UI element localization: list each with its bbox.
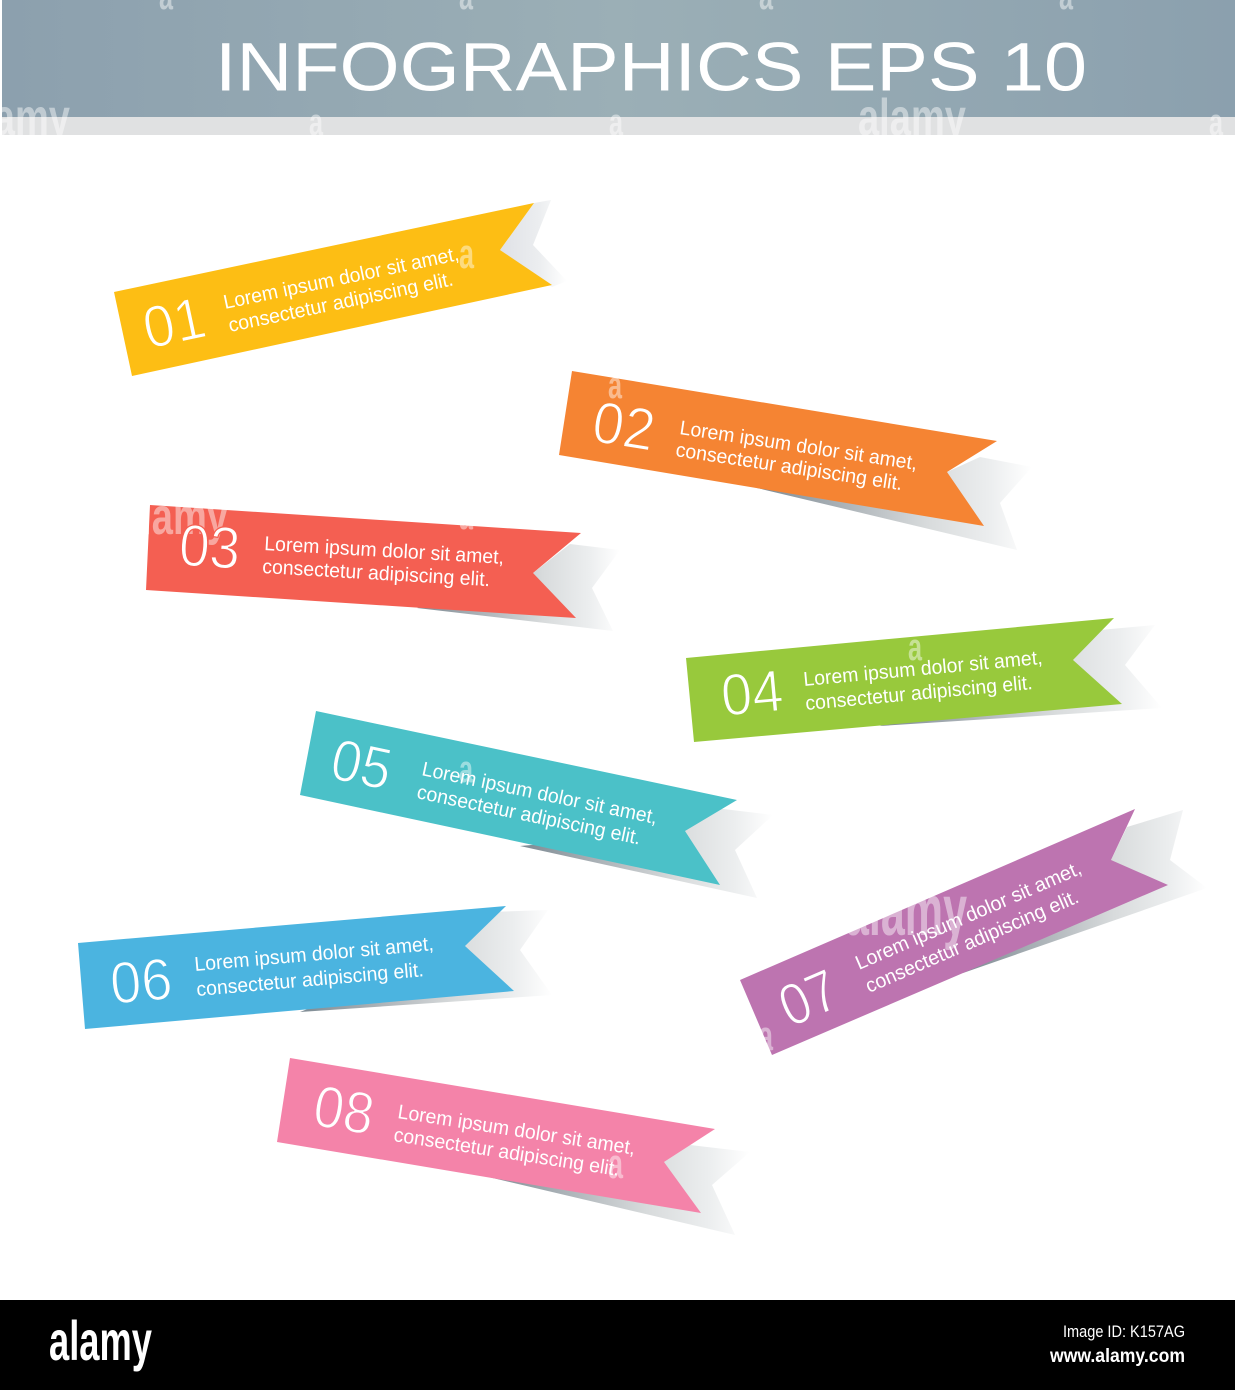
ribbon 03: alamy xyxy=(120,488,228,546)
footer logo: alamy xyxy=(49,1309,152,1372)
ribbon 08: consectetur adipiscing elit. xyxy=(392,1124,621,1181)
ribbon 05: a xyxy=(459,749,474,791)
ribbon 04: consectetur adipiscing elit. xyxy=(804,672,1033,715)
ribbon 08: 08 xyxy=(309,1073,379,1148)
ribbon 01: a xyxy=(459,230,474,277)
ribbon 02 xyxy=(559,365,1032,550)
ribbon 04: 04 xyxy=(718,657,786,729)
ribbon 02: a xyxy=(608,365,623,407)
header banner xyxy=(0,0,1235,147)
ribbon 06: consectetur adipiscing elit. xyxy=(196,959,425,1001)
ribbon 03: a xyxy=(459,496,474,538)
ribbon 07: alamy xyxy=(845,871,967,951)
image id: Image ID: K157AG xyxy=(1063,1322,1185,1341)
ribbon 07 xyxy=(740,809,1207,1059)
ribbon 02: 02 xyxy=(588,389,660,464)
ribbon 08: a xyxy=(608,1140,623,1187)
ribbon 06: Lorem ipsum dolor sit amet, xyxy=(194,933,435,976)
ribbon 03: consectetur adipiscing elit. xyxy=(262,556,491,591)
footer bar xyxy=(0,1300,1235,1390)
title: INFOGRAPHICS EPS 10 xyxy=(215,28,1087,106)
header banner: a xyxy=(1209,102,1224,144)
ribbon 02: Lorem ipsum dolor sit amet, xyxy=(678,417,919,475)
ribbon 07: 07 xyxy=(769,956,848,1040)
ribbon 06: 06 xyxy=(107,946,175,1017)
ribbon 07: a xyxy=(758,1012,773,1059)
ribbon 07: Lorem ipsum dolor sit amet, xyxy=(852,857,1085,975)
ribbon 08 xyxy=(277,1058,750,1235)
ribbon 01: Lorem ipsum dolor sit amet, xyxy=(222,243,461,314)
ribbon 06 xyxy=(78,906,552,1029)
ribbon 07: consectetur adipiscing elit. xyxy=(862,886,1082,998)
ribbon 08: Lorem ipsum dolor sit amet, xyxy=(396,1101,637,1160)
ribbon 04: a xyxy=(908,627,923,669)
ribbon 05: consectetur adipiscing elit. xyxy=(415,781,643,850)
ribbon 05: 05 xyxy=(325,726,398,803)
ribbon 04: Lorem ipsum dolor sit amet, xyxy=(802,647,1043,691)
website: www.alamy.com xyxy=(1049,1346,1185,1367)
header banner: alamy xyxy=(858,89,966,147)
ribbon 03: Lorem ipsum dolor sit amet, xyxy=(264,533,505,569)
ribbon 05: Lorem ipsum dolor sit amet, xyxy=(420,758,659,829)
ribbon 02: consectetur adipiscing elit. xyxy=(674,439,904,495)
ribbon 03: 03 xyxy=(177,512,242,582)
ribbon 05 xyxy=(300,711,773,898)
ribbon 03 xyxy=(120,488,620,631)
ribbon 01 xyxy=(114,200,567,376)
ribbon 01: consectetur adipiscing elit. xyxy=(227,269,455,337)
header banner: a xyxy=(309,102,324,144)
ribbon 01: 01 xyxy=(137,284,211,362)
header banner: a xyxy=(609,102,624,144)
ribbon 04 xyxy=(686,618,1162,742)
